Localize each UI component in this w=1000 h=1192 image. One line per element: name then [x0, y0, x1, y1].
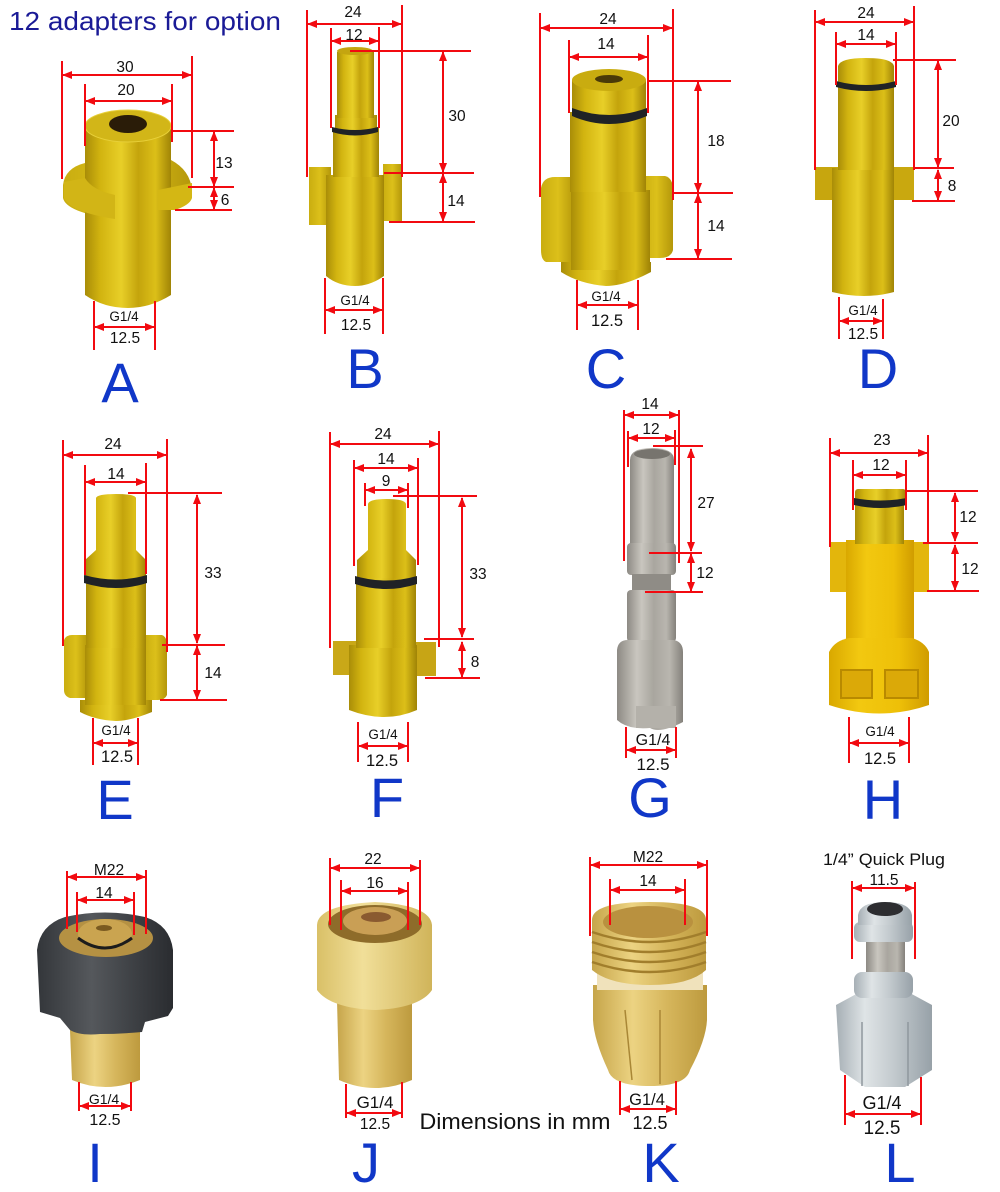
- panel: adapter C: [540, 9, 733, 400]
- adapter E dimensions: 12.5: [101, 748, 133, 766]
- adapter A dimensions: 20: [117, 82, 135, 99]
- adapter L dimensions: 12.5: [864, 1118, 900, 1139]
- adapter F dimensions: 9: [382, 473, 390, 490]
- adapter A dimensions: 30: [116, 59, 134, 76]
- adapter K body: [592, 902, 707, 1086]
- adapter G dimensions: 12.5: [636, 755, 670, 774]
- panel: adapter J: [317, 851, 432, 1192]
- adapter B dimensions: 14: [447, 193, 465, 210]
- adapter B dimensions: 12: [345, 27, 363, 44]
- panel: adapter E: [63, 436, 227, 831]
- panel: adapter K: [590, 849, 707, 1192]
- adapter J dimensions: [330, 851, 420, 1133]
- adapter G dimensions: G1/4: [636, 732, 670, 749]
- adapter I dimensions: M22: [94, 862, 124, 879]
- letter G: G: [628, 766, 672, 829]
- adapter E dimensions: G1/4: [101, 723, 131, 738]
- title: 12 adapters for option: [9, 6, 281, 36]
- adapter D dimensions: 20: [942, 113, 960, 130]
- adapter D dimensions: 24: [857, 5, 875, 22]
- adapter D dimensions: G1/4: [848, 303, 878, 318]
- adapter G dimensions: 14: [641, 396, 659, 413]
- adapter H dimensions: 12: [872, 457, 890, 474]
- letter A: A: [101, 351, 139, 414]
- adapter A body: [63, 110, 192, 308]
- adapter F dimensions: 33: [469, 566, 487, 583]
- adapter I dimensions: [67, 862, 146, 1129]
- adapter G dimensions: [624, 396, 715, 774]
- adapter B body: [309, 47, 402, 286]
- adapter C dimensions: 14: [707, 218, 725, 235]
- adapter K dimensions: G1/4: [629, 1091, 665, 1109]
- adapter C body: [541, 69, 673, 286]
- adapter A dimensions: 6: [221, 192, 229, 209]
- adapter L dimensions: 1/4” Quick Plug: [823, 850, 945, 869]
- adapter C dimensions: 24: [599, 11, 617, 28]
- adapter A dimensions: [62, 56, 234, 350]
- letter C: C: [586, 337, 626, 400]
- adapter D dimensions: 12.5: [848, 326, 878, 343]
- letter H: H: [863, 768, 903, 831]
- adapter H dimensions: 12: [959, 509, 977, 526]
- adapter D body: [815, 58, 914, 296]
- panel: adapter B: [307, 4, 475, 400]
- adapter F body: [333, 499, 436, 717]
- adapter A dimensions: G1/4: [109, 309, 139, 324]
- adapter K dimensions: [590, 849, 707, 1133]
- adapter J dimensions: G1/4: [357, 1093, 393, 1112]
- adapter K dimensions: 14: [639, 873, 657, 890]
- adapter H dimensions: [830, 432, 979, 768]
- panel: adapter G: [617, 396, 715, 829]
- adapter A dimensions: 12.5: [110, 330, 140, 347]
- adapter B dimensions: G1/4: [340, 293, 370, 308]
- adapter B dimensions: 24: [344, 4, 362, 21]
- adapter B dimensions: [307, 4, 475, 334]
- panel: adapter D: [815, 5, 960, 400]
- adapter J dimensions: 22: [364, 851, 382, 868]
- adapter H dimensions: 12: [961, 561, 979, 578]
- adapter J dimensions: 16: [366, 875, 384, 892]
- adapter F dimensions: 24: [374, 426, 392, 443]
- adapter F dimensions: 8: [471, 654, 479, 671]
- adapter E dimensions: 14: [204, 665, 222, 682]
- panel: adapter A: [62, 56, 234, 414]
- adapter F dimensions: G1/4: [368, 727, 398, 742]
- adapter E dimensions: 33: [204, 565, 222, 582]
- adapter L body: [836, 902, 932, 1087]
- adapter D dimensions: 14: [857, 27, 875, 44]
- adapter H dimensions: G1/4: [865, 724, 895, 739]
- adapter G dimensions: 12: [642, 421, 660, 438]
- adapter L dimensions: [823, 850, 945, 1139]
- adapter C dimensions: 18: [707, 133, 725, 150]
- adapter C dimensions: 12.5: [591, 312, 623, 330]
- note: dimensions in mm: Dimensions in mm: [420, 1109, 610, 1134]
- panel: adapter L: [823, 850, 945, 1192]
- adapter D dimensions: [815, 5, 960, 343]
- adapter C dimensions: 14: [597, 36, 615, 53]
- adapter G dimensions: 12: [696, 565, 714, 582]
- adapter E body: [64, 494, 167, 721]
- adapter I dimensions: 12.5: [89, 1112, 121, 1129]
- panel: adapter H: [829, 432, 979, 831]
- adapter F dimensions: 12.5: [366, 752, 398, 770]
- adapter L dimensions: 11.5: [869, 872, 899, 889]
- adapter D dimensions: 8: [948, 178, 956, 195]
- adapter I body: [37, 912, 173, 1087]
- adapter E dimensions: 14: [107, 466, 125, 483]
- adapter K dimensions: 12.5: [632, 1113, 668, 1133]
- adapter G dimensions: 27: [697, 495, 715, 512]
- adapter B dimensions: 30: [448, 108, 466, 125]
- adapter F dimensions: [330, 426, 487, 770]
- letter B: B: [346, 337, 384, 400]
- adapter J body: [317, 902, 432, 1088]
- letter F: F: [370, 766, 404, 829]
- adapter F dimensions: 14: [377, 451, 395, 468]
- adapter G body: [617, 448, 683, 730]
- adapter E dimensions: 24: [104, 436, 122, 453]
- adapter A dimensions: 13: [215, 155, 233, 172]
- adapter C dimensions: [540, 9, 733, 330]
- adapter E dimensions: [63, 436, 227, 766]
- adapter B dimensions: 12.5: [341, 317, 371, 334]
- adapter L dimensions: G1/4: [862, 1093, 902, 1113]
- adapter I dimensions: 14: [95, 885, 113, 902]
- letter E: E: [96, 768, 134, 831]
- panel: adapter F: [330, 426, 487, 829]
- adapter H dimensions: 12.5: [864, 750, 896, 768]
- adapter C dimensions: G1/4: [591, 289, 621, 304]
- adapter H dimensions: 23: [873, 432, 891, 449]
- letter D: D: [858, 337, 898, 400]
- adapter H body: [829, 489, 929, 714]
- adapter J dimensions: 12.5: [360, 1116, 390, 1133]
- adapter I dimensions: G1/4: [89, 1091, 119, 1107]
- panel: adapter I: [37, 862, 173, 1192]
- adapter K dimensions: M22: [633, 849, 663, 866]
